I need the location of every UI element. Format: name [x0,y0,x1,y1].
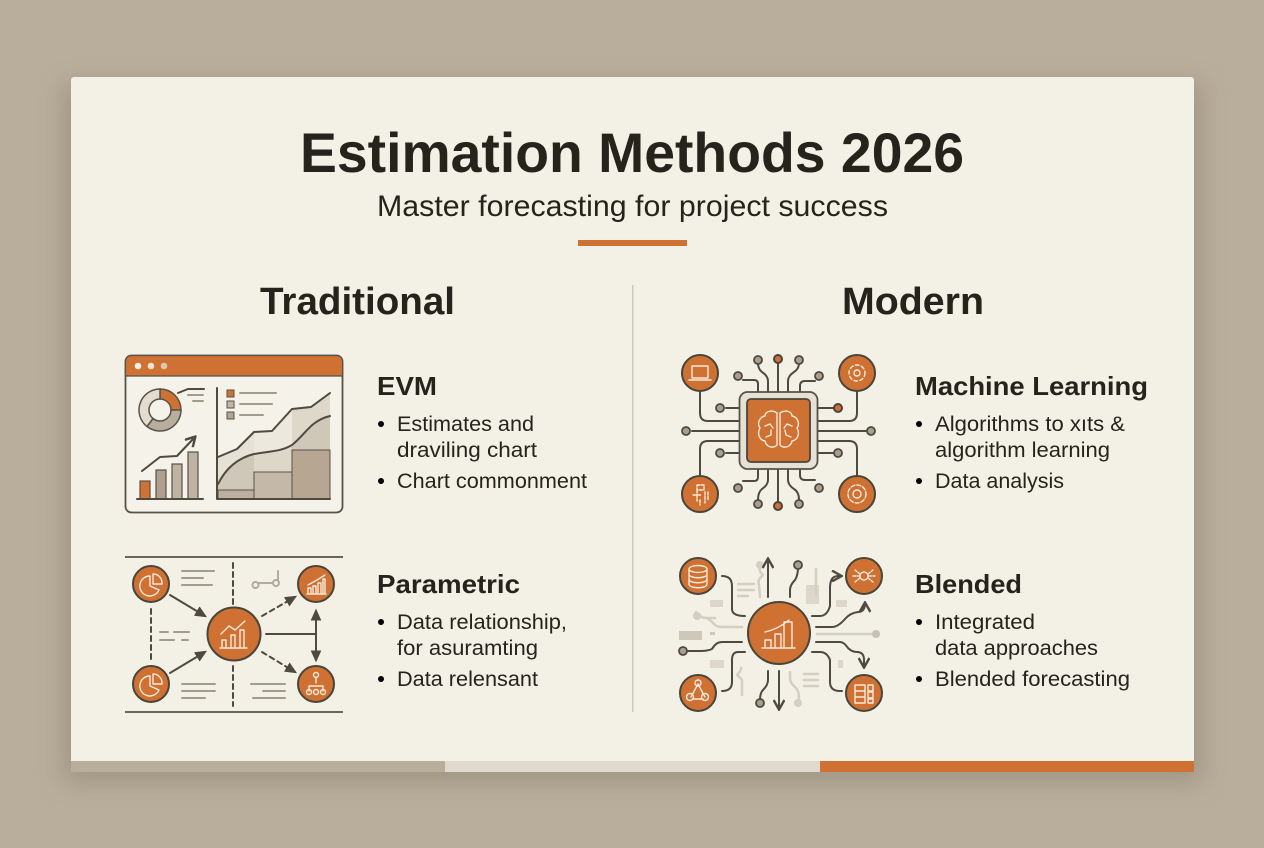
column divider [632,285,634,712]
text block: machine learning: Machine Learning [915,371,1148,401]
text block: parametric [377,569,567,691]
text block: EVM [377,371,587,493]
nodes [133,566,169,602]
text block: machine learning: Data analysis [935,470,1064,493]
faded background marks [679,561,880,707]
text block: EVM: Estimates and [397,413,534,436]
text block: parametric: for asuramting [397,637,538,660]
text block: parametric: Parametric [377,569,520,599]
text block: parametric: Data relensant [397,668,538,691]
text block: EVM: EVM [377,371,437,401]
panel: modern [679,281,1148,711]
text block: blended [915,569,1130,691]
panel: traditional [125,281,587,712]
title: Estimation Methods 2026 [300,121,964,184]
text block: machine learning: Algorithms to xıts & [935,413,1125,436]
card background [71,77,1194,772]
text block: parametric: Data relationship, [397,611,567,634]
text block: machine learning: algorithm learning [935,439,1110,462]
area chart [218,393,330,499]
card shadow [64,84,1201,782]
icon: machine learning chip [682,355,875,512]
icon: brain [759,411,798,447]
nodes [748,602,810,664]
text block: blended: data approaches [935,637,1098,660]
text block: EVM: Chart commonment [397,470,587,493]
text block: blended: Blended [915,569,1022,599]
text block: blended: Integrated [935,611,1035,634]
circuit traces [692,360,866,503]
legend [227,390,234,397]
icon: parametric network [125,557,343,712]
bar chart [140,452,198,499]
node icons [682,355,718,391]
text block: EVM: draviling chart [397,439,537,462]
chip [740,392,818,469]
heading: modern: Modern [842,281,984,323]
donut chart [139,389,181,431]
heading: traditional: Traditional [260,281,455,323]
connectors [722,576,745,616]
icon: blended hub [679,558,882,711]
arrows [170,595,205,616]
footer tricolor bar [71,761,1194,772]
icon: EVM dashboard [126,356,342,512]
text block: blended: Blended forecasting [935,668,1130,691]
subtitle: Master forecasting for project success [377,190,888,223]
circuit nodes [682,355,875,510]
title accent rule [578,240,687,246]
text block: machine learning [915,371,1148,493]
